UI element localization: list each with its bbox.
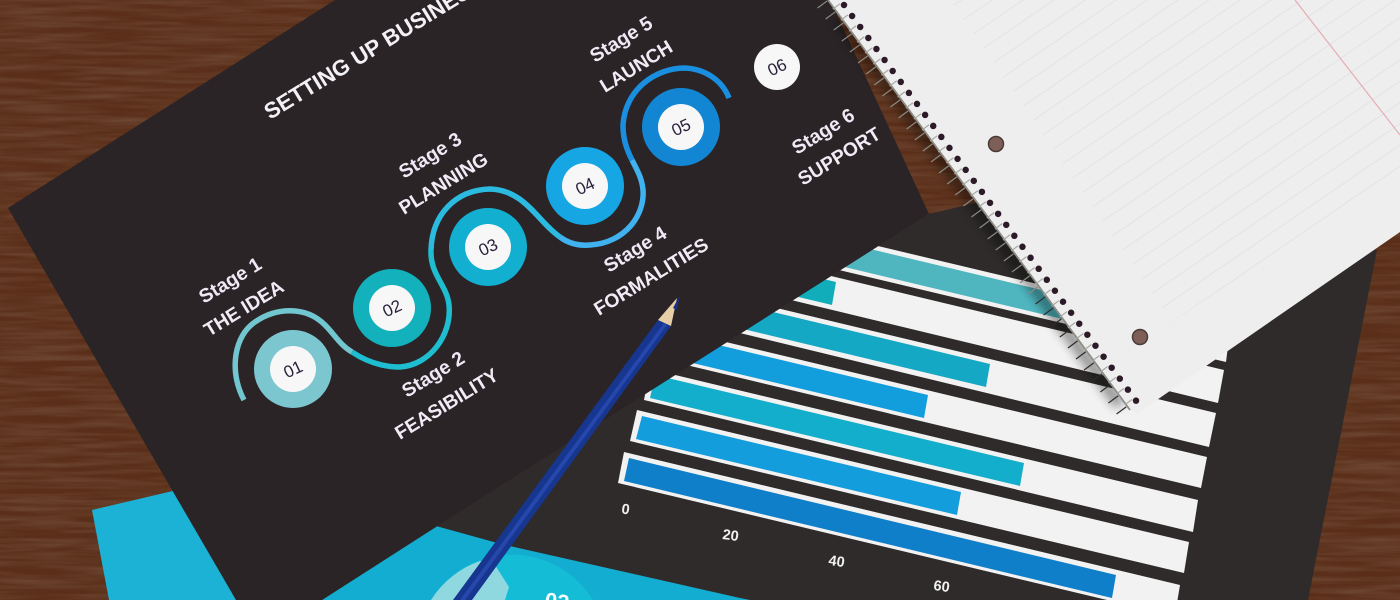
stage marker 04: 04 <box>573 174 598 199</box>
notebook page <box>828 0 1400 413</box>
red margin line <box>1295 0 1400 135</box>
stage marker 01: 01 <box>281 357 306 382</box>
stage marker 02 <box>353 269 431 347</box>
lower dark chart sheet <box>322 190 1377 600</box>
stage marker 01 <box>254 330 332 408</box>
axis labels: 20 <box>721 527 740 545</box>
spiral notebook <box>822 0 1400 414</box>
bar 6 <box>630 410 1189 573</box>
stage 1 label: Stage 1 <box>195 253 266 308</box>
icon: blue pencil <box>453 295 680 600</box>
bar 4 <box>657 327 1207 488</box>
hole punch: lower <box>1132 330 1148 344</box>
main dark sheet: setting up business <box>8 0 929 600</box>
axis labels: 40 <box>827 553 846 571</box>
stage 5 label <box>586 12 677 97</box>
blue paper with step circle <box>322 526 750 600</box>
hole punch: upper <box>988 136 1004 152</box>
stage marker 03 <box>449 208 527 286</box>
stage 2 label: FEASIBILITY <box>392 365 503 444</box>
stage marker 03: 03 <box>476 235 501 260</box>
stage marker 06: 06 <box>765 55 790 80</box>
axis labels: 0 <box>620 502 631 519</box>
stage marker 05 <box>642 88 720 166</box>
stage 4 label: Stage 4 <box>600 222 671 277</box>
blue paper, left sheet <box>92 490 236 600</box>
stage 2 label: Stage 2 <box>398 347 469 402</box>
bar 3 <box>670 284 1216 447</box>
notebook shadow <box>840 20 1120 405</box>
stage 5 label: Stage 5 <box>586 12 657 67</box>
stage marker 06 <box>754 44 800 90</box>
axis labels: 60 <box>932 578 951 596</box>
stage marker 04 <box>546 147 624 225</box>
stage 4 label: FORMALITIES <box>591 234 713 320</box>
spiral coils <box>822 0 1137 414</box>
bar 1 <box>696 204 1230 362</box>
stage 6 label: Stage 6 <box>788 104 859 159</box>
stage 1 label <box>195 253 288 341</box>
bar 2 <box>683 242 1224 403</box>
stage marker 02: 02 <box>380 296 405 321</box>
horizontal bar chart <box>618 204 1230 600</box>
ruled lines <box>950 0 1400 322</box>
stage marker 05: 05 <box>669 115 694 140</box>
stage 6 label: SUPPORT <box>795 124 885 190</box>
stage 1 label: THE IDEA <box>201 276 288 341</box>
stage 3 label: Stage 3 <box>395 128 466 183</box>
stage 3 label: PLANNING <box>396 149 492 219</box>
bar 7 <box>618 452 1180 600</box>
bar 5 <box>644 369 1198 532</box>
winding timeline path <box>235 68 729 400</box>
axis labels <box>620 502 951 596</box>
stage 5 label: LAUNCH <box>597 37 677 97</box>
